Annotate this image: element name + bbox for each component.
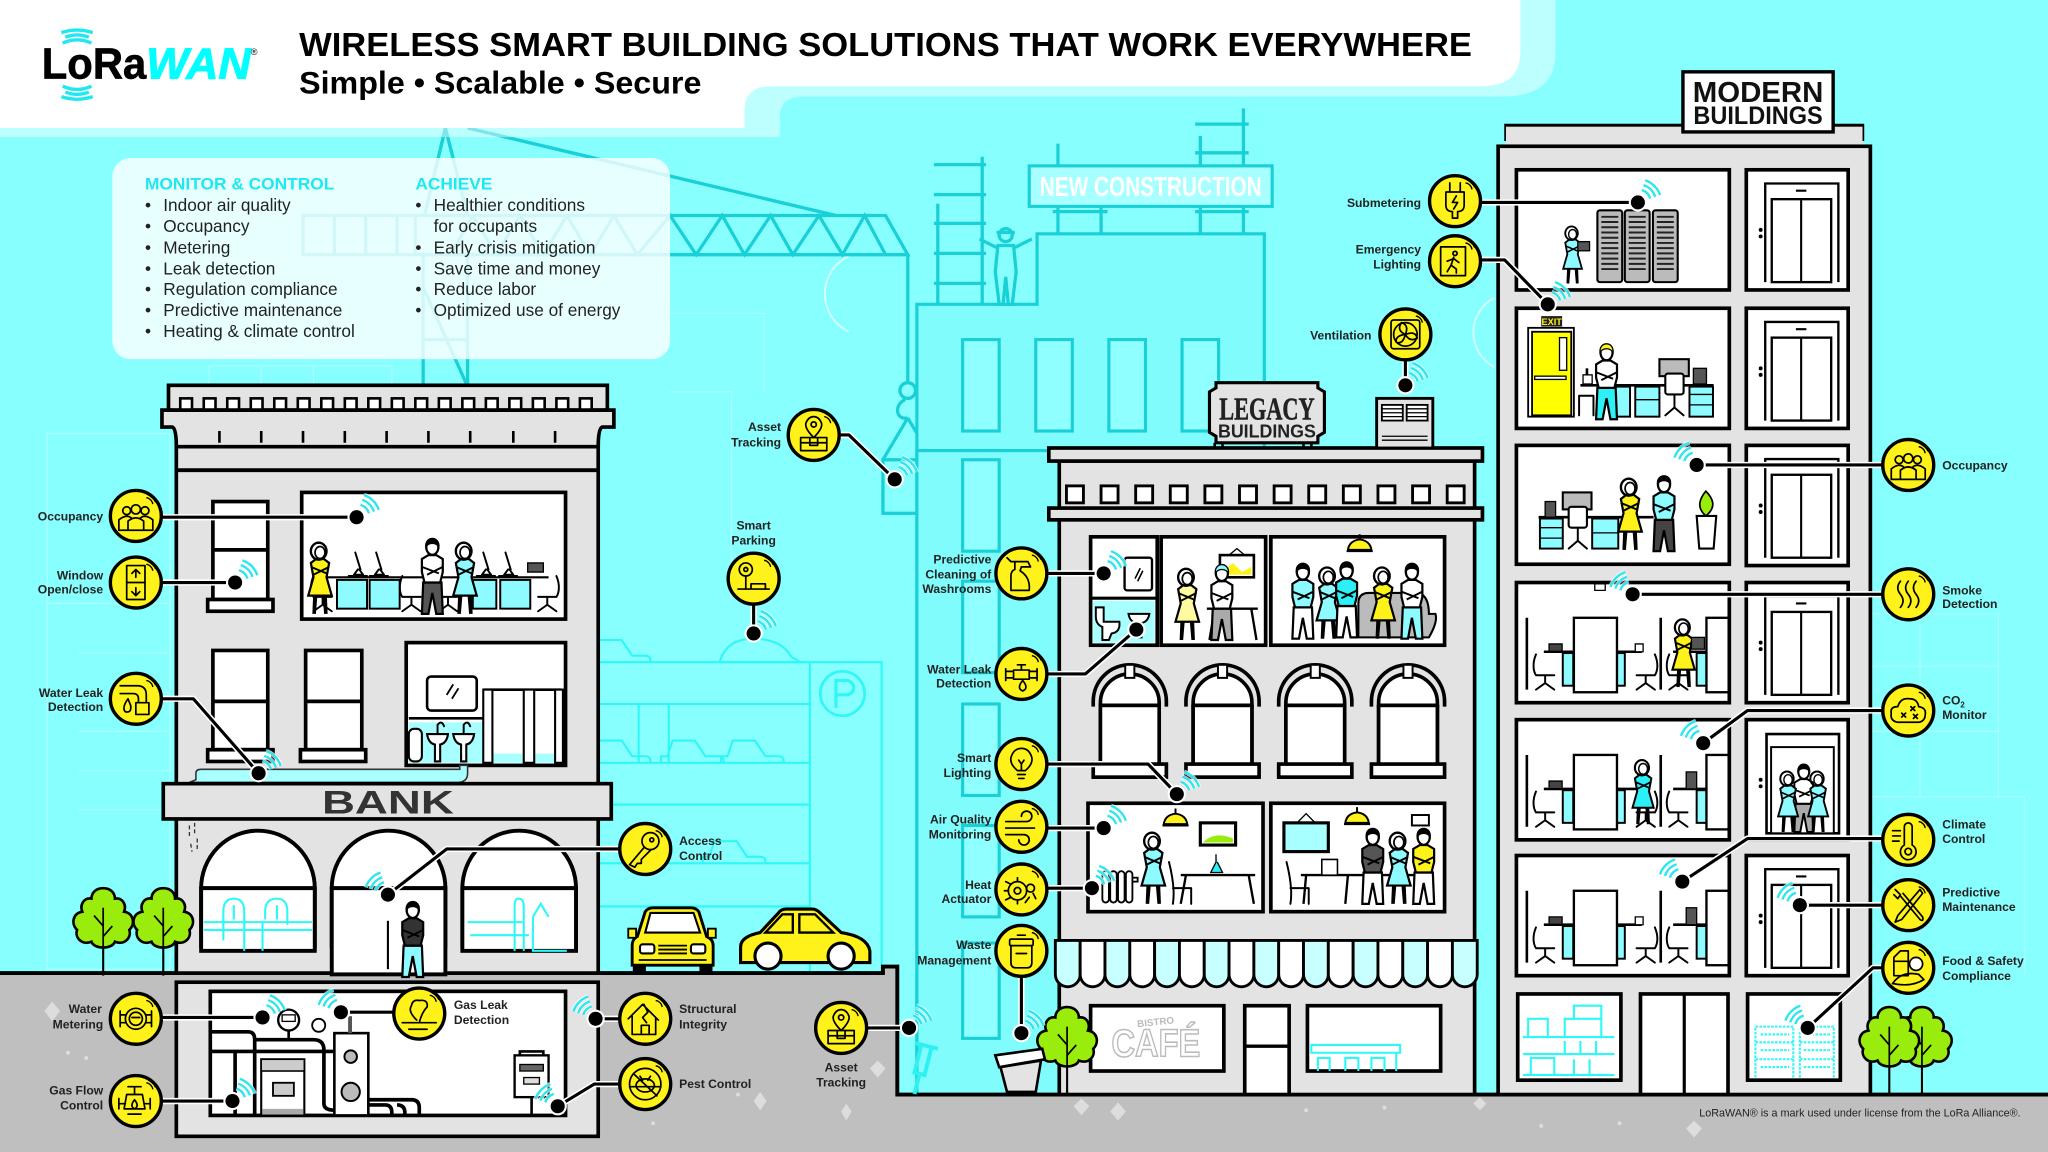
label: Tracking [731, 436, 781, 450]
icon: water meter [110, 993, 161, 1044]
legacy buildings sign: BUILDINGS [1218, 421, 1316, 442]
elevators [1746, 170, 1848, 976]
modern building [1498, 125, 1870, 1095]
sensor: occupancy modern [1674, 440, 2008, 490]
sensor: heat actuator [941, 864, 1114, 915]
label: Cleaning of [925, 568, 992, 582]
label: Air Quality [930, 813, 992, 827]
label: Management [917, 954, 991, 968]
sensor: water leak legacy [927, 620, 1145, 699]
bank building [162, 385, 614, 1136]
icon: exit sign [1430, 236, 1480, 287]
sensor: predictive maintenance [1778, 880, 2016, 931]
label: CO [1942, 694, 1960, 708]
bank arched windows [201, 831, 576, 974]
front view car [628, 908, 716, 972]
label: Metering [53, 1018, 103, 1032]
sensor: predictive cleaning of washrooms [922, 548, 1126, 599]
trees near bank [73, 888, 193, 976]
monitor and control list: Predictive maintenance [163, 300, 342, 320]
label: Occupancy [1942, 459, 2008, 473]
modern floor 2: office with exit door [1516, 308, 1729, 428]
radiator [1102, 871, 1138, 903]
label [944, 751, 991, 780]
modern floor 1: server room [1516, 170, 1729, 290]
label [454, 998, 509, 1027]
achieve list: Reduce labor [434, 279, 536, 299]
cafe storefront: BISTRO [1137, 1015, 1175, 1030]
icon: waste bin [996, 925, 1047, 976]
label: Predictive [933, 553, 992, 567]
label: Water [69, 1002, 102, 1016]
icon: gas valve [110, 1076, 161, 1127]
label: Asset [825, 1061, 858, 1075]
achieve list: • [415, 258, 421, 278]
icon: window arrows [110, 557, 161, 608]
crane [303, 128, 933, 513]
scaffolding [934, 108, 1249, 304]
label: Smoke [1942, 583, 1982, 597]
label: Predictive [1942, 886, 2000, 900]
achieve list: • [415, 300, 421, 320]
achieve list: Optimized use of energy [434, 300, 621, 320]
label [1942, 818, 1986, 846]
label: Lighting [944, 766, 991, 780]
legacy arched windows [1093, 665, 1445, 777]
bank pipe [189, 765, 468, 782]
legacy building [1049, 448, 1482, 1095]
icon: location pin box [788, 409, 839, 460]
sensor: waste management [917, 925, 1047, 1042]
label: Ventilation [1310, 329, 1371, 343]
bank washroom [406, 643, 566, 765]
legacy lounge room [1161, 537, 1266, 645]
cafe awning [1055, 940, 1477, 987]
icon: faucet drop [996, 648, 1047, 699]
label: Actuator [941, 892, 992, 906]
label [679, 1002, 736, 1032]
icon: fan [1380, 309, 1431, 360]
legacy dining room left [1088, 803, 1263, 912]
label: Water Leak [927, 662, 992, 676]
icon: people [1883, 440, 1934, 490]
monitor and control list: Occupancy [163, 216, 250, 236]
label: Gas Flow [49, 1084, 104, 1098]
label [679, 834, 722, 863]
construction worker [980, 229, 1032, 304]
sensor: food and safety compliance [1785, 942, 2024, 1037]
monitor and control list: • [145, 321, 151, 341]
label [731, 420, 781, 450]
icon: gas cloud [394, 988, 445, 1039]
bank sign: BANK [322, 784, 454, 821]
label: Control [1942, 832, 1985, 846]
icon: light bulb [996, 739, 1047, 790]
label [1942, 954, 2024, 983]
bank windows second floor [208, 650, 366, 761]
monitor and control list: • [145, 195, 151, 215]
achieve list [415, 174, 621, 320]
sensor: asset tracking crane [731, 409, 917, 488]
monitor and control list: • [145, 237, 151, 257]
label: Control [60, 1099, 103, 1113]
label [38, 568, 104, 597]
modern floor 2: office with exit door: EXIT [1542, 317, 1562, 327]
modern floor 6: desks [1516, 856, 1729, 976]
tree near cafe [1037, 1007, 1097, 1095]
sensor: occupancy bank [38, 490, 379, 541]
monitor and control list [145, 174, 355, 341]
monitor and control list: Indoor air quality [163, 195, 291, 215]
ground [0, 967, 2048, 1152]
sensor: ventilation [1310, 309, 1431, 394]
legacy washroom [1091, 537, 1157, 645]
icon: food [1883, 942, 1934, 993]
label: 2 [1960, 700, 1965, 709]
icon: smoke [1883, 569, 1934, 620]
icon: location pin box [816, 1002, 867, 1053]
bank roof cornice [162, 385, 614, 470]
new construction sign [1029, 166, 1272, 206]
sensor: smart parking [728, 519, 779, 643]
label: Integrity [679, 1018, 727, 1032]
pale background building outlines [47, 256, 2024, 973]
bank basement [176, 982, 598, 1136]
title: WIRELESS SMART BUILDING SOLUTIONS THAT WORK EVERYWHERE [299, 27, 1472, 64]
sensor: water metering [53, 993, 285, 1044]
label: Monitor [1942, 708, 1987, 722]
bank tall window [208, 502, 273, 611]
logo [42, 30, 258, 99]
subtitle: Simple • Scalable • Secure [299, 65, 701, 100]
label [1942, 694, 1987, 722]
sensor: CO2 monitor [1681, 685, 1987, 752]
logo: ® [251, 47, 258, 57]
sensor: window open/close [38, 557, 257, 608]
monitor and control list: • [145, 300, 151, 320]
monitor and control list: Regulation compliance [163, 279, 338, 299]
achieve list: Save time and money [434, 258, 601, 278]
modern floor 4: desks [1516, 583, 1729, 703]
label: Washrooms [922, 582, 992, 596]
icon: thermometer [1883, 814, 1934, 865]
label: Occupancy [38, 509, 103, 523]
label: Tracking [816, 1076, 866, 1090]
sensor: asset tracking equipment [816, 1002, 931, 1090]
label [731, 519, 776, 548]
ghost teller figures [204, 899, 567, 951]
label: Waste [956, 938, 992, 952]
label [927, 662, 992, 691]
label: Open/close [38, 583, 103, 597]
sensor: climate control [1660, 814, 1986, 891]
label: Parking [731, 534, 776, 548]
side view car [741, 909, 870, 969]
trees near modern building [1860, 1007, 1952, 1095]
label: Detection [454, 1013, 509, 1027]
icon: parking pin and car [728, 553, 779, 604]
header band [0, 0, 1556, 137]
monitor and control list: • [145, 279, 151, 299]
icon: gears [996, 864, 1047, 915]
label: Smart [736, 519, 771, 533]
monitor and control list: • [145, 216, 151, 236]
label: Emergency [1356, 242, 1421, 256]
label [1942, 886, 2016, 914]
achieve list: • [415, 237, 421, 257]
label [929, 813, 992, 842]
label: Access [679, 834, 722, 848]
achieve list: • [415, 279, 421, 299]
label: Food & Safety [1942, 954, 2024, 968]
drips [189, 823, 197, 852]
icon: cracked house [620, 993, 671, 1044]
modern buildings sign: BUILDINGS [1693, 103, 1823, 130]
monitor and control list: Metering [163, 237, 230, 257]
label [49, 1084, 104, 1113]
bank sign [163, 784, 611, 821]
label [917, 938, 992, 968]
waste bin [995, 1049, 1045, 1092]
footer trademark note: LoRaWAN® is a mark used under license from the LoRa Alliance®. [1699, 1108, 2021, 1120]
sensor: air quality monitoring [929, 801, 1126, 852]
label: Smart [957, 751, 991, 765]
modern floor 3: office [1516, 445, 1729, 564]
sensor: emergency lighting [1356, 236, 1570, 313]
label [1942, 583, 1997, 611]
jackhammer [903, 1043, 938, 1097]
label: Asset [748, 420, 781, 434]
modern buildings sign: MODERN [1693, 77, 1823, 109]
label: Maintenance [1942, 900, 2016, 914]
label [39, 686, 103, 714]
icon: tools [1883, 880, 1934, 931]
icon: wind [996, 801, 1047, 852]
legacy dining room right [1271, 803, 1445, 912]
label: Water Leak [39, 686, 103, 700]
new construction sign: NEW CONSTRUCTION [1040, 171, 1262, 202]
sensor: gas flow control [49, 1076, 255, 1127]
logo: WAN [146, 40, 252, 88]
label: Structural [679, 1002, 736, 1016]
label [53, 1002, 103, 1032]
legacy group room [1271, 534, 1445, 645]
sensor: smoke detection [1610, 569, 1997, 620]
label: Window [57, 568, 104, 582]
label: Gas Leak [454, 998, 508, 1012]
achieve list: ACHIEVE [415, 174, 492, 193]
new construction building [917, 108, 1264, 1095]
monitor and control list: MONITOR & CONTROL [145, 174, 334, 193]
achieve list: Early crisis mitigation [434, 237, 595, 257]
achieve list: for occupants [434, 216, 537, 236]
label: Detection [1942, 597, 1997, 611]
label [1356, 242, 1421, 271]
modern ground floor [1518, 994, 1840, 1095]
icon: leaking pipe [110, 673, 161, 724]
sensor: structural integrity [573, 993, 736, 1044]
icon: CO2 cloud [1883, 685, 1934, 736]
icon: people [110, 490, 161, 541]
label: Detection [48, 700, 103, 714]
icon: key [620, 824, 671, 874]
parking garage [588, 639, 882, 973]
label [816, 1061, 866, 1090]
sensor: gas leak detection [319, 988, 509, 1039]
label: Submetering [1347, 196, 1421, 210]
cafe storefront: CAFÉ [1112, 1022, 1200, 1066]
header panel [0, 0, 1520, 128]
sensor: access control [366, 824, 722, 904]
label: Control [679, 849, 722, 863]
monitor and control list: Heating & climate control [163, 321, 355, 341]
monitor and control list: • [145, 258, 151, 278]
label: Pest Control [679, 1077, 751, 1091]
label: Climate [1942, 818, 1986, 832]
icon: pest [620, 1059, 671, 1110]
sensor: smart lighting [944, 739, 1199, 803]
modern floor 5: desks [1516, 720, 1729, 840]
label: Detection [936, 677, 991, 691]
monitor and control list: Leak detection [163, 258, 275, 278]
label [941, 878, 992, 906]
label: Compliance [1942, 969, 2011, 983]
person at bank door [402, 902, 423, 977]
icon: spray bottle [996, 548, 1047, 599]
label: Lighting [1373, 257, 1421, 271]
modern buildings sign [1683, 72, 1833, 132]
info panel [112, 158, 670, 359]
legacy buildings sign: LEGACY [1219, 391, 1315, 426]
bank office room [302, 492, 566, 619]
icon: plug [1430, 176, 1480, 227]
sensor: submetering [1347, 176, 1660, 227]
label: Monitoring [929, 828, 991, 842]
label [922, 553, 992, 596]
logo: LoRa [42, 40, 147, 88]
cafe storefront [1091, 1006, 1441, 1095]
sensor: water leak bank [39, 673, 281, 782]
sensor: pest control [536, 1059, 751, 1115]
legacy buildings sign [1209, 383, 1324, 448]
rooftop ventilation unit [1377, 398, 1433, 448]
achieve list: Healthier conditions [434, 195, 585, 215]
label: Heat [965, 878, 991, 892]
achieve list: • [415, 195, 421, 215]
